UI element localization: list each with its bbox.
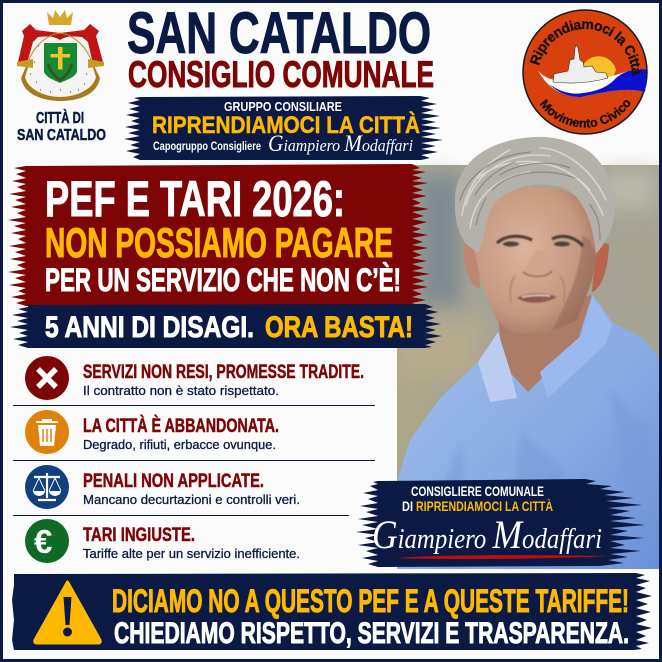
city name xyxy=(17,108,106,144)
features xyxy=(497,236,583,303)
red curtains xyxy=(18,24,103,62)
list item: tari ingiuste: TARI INGIUSTE. xyxy=(83,524,195,546)
icon: warning triangle xyxy=(35,582,100,643)
banner: gruppo consiliare xyxy=(124,96,443,160)
subtitle: CONSIGLIO COMUNALE xyxy=(128,54,434,95)
list item: città abbandonata: Degrado, rifiuti, erbacce ovunque. xyxy=(83,437,276,452)
name badge: Giampiero Modaffari xyxy=(356,479,645,567)
name badge: Giampiero Modaffari: Giampiero Modaffari xyxy=(372,512,602,557)
list item: penali non applicate xyxy=(25,465,300,509)
city name: SAN CATALDO xyxy=(17,127,106,144)
banner: gruppo consiliare: RIPRENDIAMOCI LA CITTÀ xyxy=(152,111,420,139)
shirt xyxy=(397,300,660,570)
list item: città abbandonata: LA CITTÀ È ABBANDONATA. xyxy=(83,414,279,437)
crown xyxy=(47,10,73,25)
name badge: Giampiero Modaffari: RIPRENDIAMOCI LA CITTÀ xyxy=(416,498,553,514)
icon: euro: € xyxy=(34,523,52,560)
ears xyxy=(463,242,480,288)
icon: euro xyxy=(25,519,69,563)
collar xyxy=(478,332,517,402)
headline line 1: PEF E TARI 2026: xyxy=(45,171,345,227)
banner: gruppo consiliare: Capogruppo Consigliere xyxy=(153,141,261,153)
banner: headline PEF e TARI xyxy=(8,164,430,306)
green shield xyxy=(44,43,77,83)
list item: penali non applicate: PENALI NON APPLICATE. xyxy=(83,470,264,492)
ermine mantle xyxy=(25,31,96,97)
neck xyxy=(498,295,592,392)
name badge: Giampiero Modaffari: DI xyxy=(402,498,413,514)
list item: penali non applicate: Mancano decurtazioni e controlli veri. xyxy=(83,492,300,507)
banner: gruppo consiliare: Giampiero Modaffari xyxy=(268,131,413,156)
logo: Riprendiamoci la Città xyxy=(522,9,648,135)
icon: cross xyxy=(25,356,69,400)
logo: Riprendiamoci la Città: Movimento Civico xyxy=(540,98,630,128)
banner: gruppo consiliare: GRUPPO CONSILIARE xyxy=(224,100,342,114)
photo background xyxy=(397,158,659,481)
crest: city coat of arms xyxy=(17,10,104,101)
list item: città abbandonata xyxy=(25,410,279,454)
banner: headline PEF e TARI: PER UN SERVIZIO CHE NON C’È! xyxy=(45,262,401,298)
city name: CITTÀ DI xyxy=(36,108,84,127)
list item: tari ingiuste xyxy=(25,519,300,563)
icon: trash bin xyxy=(25,410,69,454)
face xyxy=(474,187,596,334)
gold frame xyxy=(21,62,100,101)
banner: headline PEF e TARI: NON POSSIAMO PAGARE xyxy=(45,219,393,266)
name badge: Giampiero Modaffari: CONSIGLIERE COMUNALE xyxy=(411,483,544,499)
icon: scales xyxy=(25,465,69,509)
photo: portrait of Giampiero Modaffari xyxy=(397,137,660,570)
list item: servizi non resi: Il contratto non è stato rispettato. xyxy=(83,383,279,398)
banner: 5 anni di disagi xyxy=(10,304,442,348)
list item: servizi non resi xyxy=(25,356,364,400)
bottom call-to-action banner xyxy=(12,573,652,650)
hair xyxy=(455,137,615,254)
banner: 5 anni di disagi: 5 ANNI DI DISAGI. xyxy=(45,311,254,344)
logo: Riprendiamoci la Città: Riprendiamoci la Città xyxy=(530,20,642,76)
list item: tari ingiuste: Tariffe alte per un servizio inefficiente. xyxy=(83,546,300,561)
banner: 5 anni di disagi: ORA BASTA! xyxy=(265,311,413,344)
title: SAN CATALDO xyxy=(127,1,431,66)
list item: servizi non resi: SERVIZI NON RESI, PROMESSE TRADITE. xyxy=(83,361,364,383)
